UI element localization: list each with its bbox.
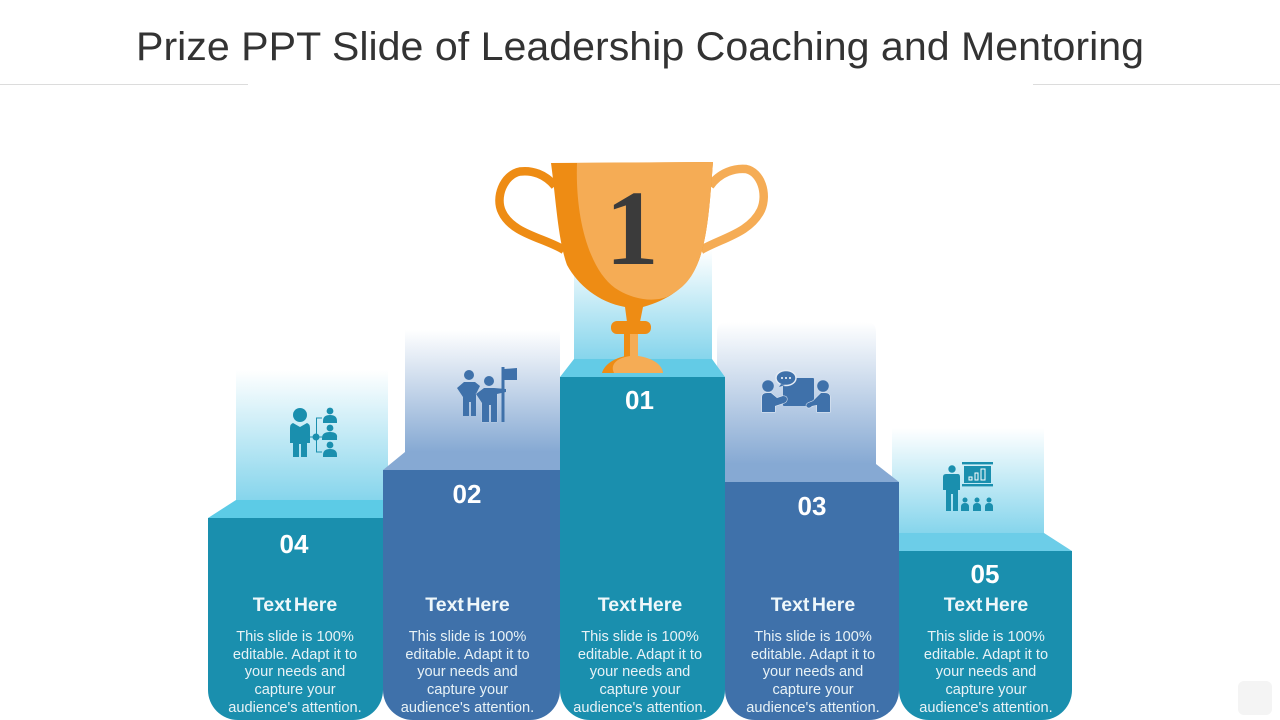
trophy cup bbox=[551, 162, 713, 322]
body text 03: your needs and bbox=[763, 664, 863, 680]
body text 05: audience's attention. bbox=[919, 700, 1053, 716]
front face 03 bbox=[725, 482, 899, 720]
heading 05: Text Here bbox=[944, 594, 1028, 616]
number 04: 04 bbox=[280, 529, 309, 559]
body text 02: audience's attention. bbox=[401, 700, 534, 716]
body text 01: your needs and bbox=[590, 664, 690, 680]
body text 01: editable. Adapt it to bbox=[578, 647, 702, 663]
body text 05: This slide is 100% bbox=[927, 629, 1045, 645]
podium step: 01 bbox=[560, 250, 725, 720]
body text 05: capture your bbox=[945, 682, 1027, 698]
back panel 04 bbox=[236, 370, 388, 500]
corner placeholder square bbox=[1238, 681, 1272, 715]
icon: gold trophy bbox=[499, 162, 764, 373]
trophy right handle bbox=[701, 169, 764, 250]
body text 04: audience's attention. bbox=[228, 700, 362, 716]
podium step: 03 bbox=[717, 322, 899, 720]
top face 05 bbox=[899, 533, 1072, 551]
trophy stem and knob bbox=[624, 330, 638, 362]
body text 02: your needs and bbox=[417, 664, 518, 680]
front face 01 bbox=[560, 377, 725, 720]
icon: two people with speech bubble and board bbox=[762, 370, 830, 412]
heading 03: Text Here bbox=[771, 594, 855, 616]
title: Prize PPT Slide of Leadership Coaching and Mentoring bbox=[136, 25, 1144, 69]
body text 04: editable. Adapt it to bbox=[233, 647, 357, 663]
body text 04: capture your bbox=[254, 682, 336, 698]
top face 03 bbox=[725, 464, 899, 482]
body text 02: This slide is 100% bbox=[409, 629, 526, 645]
number 05: 05 bbox=[971, 559, 999, 589]
body text 01: This slide is 100% bbox=[581, 629, 699, 645]
podium step: 02 bbox=[383, 330, 560, 720]
trophy left handle bbox=[499, 171, 564, 250]
back panel 02 bbox=[405, 330, 560, 452]
body text 02: capture your bbox=[427, 682, 508, 698]
front face 05 bbox=[899, 551, 1072, 720]
body text 03: capture your bbox=[772, 682, 854, 698]
trophy base bbox=[602, 356, 663, 373]
icon: two people with flag bbox=[457, 367, 517, 422]
number 01: 01 bbox=[625, 385, 654, 415]
number 02: 02 bbox=[453, 479, 481, 509]
body text 03: editable. Adapt it to bbox=[751, 647, 875, 663]
back panel 01 bbox=[574, 250, 712, 359]
body text 01: capture your bbox=[599, 682, 681, 698]
front face 02 bbox=[383, 470, 560, 720]
heading 01: Text Here bbox=[598, 594, 682, 616]
top face 04 bbox=[208, 500, 383, 518]
icon: presenter with chart and audience bbox=[943, 462, 993, 511]
podium step: 04 bbox=[208, 370, 388, 720]
podium step: 05 bbox=[892, 428, 1072, 720]
body text 04: This slide is 100% bbox=[236, 629, 354, 645]
body text 02: editable. Adapt it to bbox=[405, 647, 530, 663]
front face 04 bbox=[208, 518, 383, 720]
body text 05: editable. Adapt it to bbox=[924, 647, 1048, 663]
back panel 03 bbox=[717, 322, 876, 464]
back panel 05 bbox=[892, 428, 1044, 533]
top face 01 bbox=[560, 359, 725, 377]
heading 02: Text Here bbox=[425, 594, 510, 616]
icon: leader with team hierarchy bbox=[290, 408, 337, 457]
number 03: 03 bbox=[798, 491, 826, 521]
body text 03: audience's attention. bbox=[746, 700, 880, 716]
top face 02 bbox=[383, 452, 560, 470]
body text 03: This slide is 100% bbox=[754, 629, 872, 645]
body text 01: audience's attention. bbox=[573, 700, 707, 716]
heading 04: Text Here bbox=[253, 594, 337, 616]
body text 04: your needs and bbox=[245, 664, 345, 680]
trophy numeral: 1 bbox=[605, 170, 659, 288]
body text 05: your needs and bbox=[936, 664, 1036, 680]
